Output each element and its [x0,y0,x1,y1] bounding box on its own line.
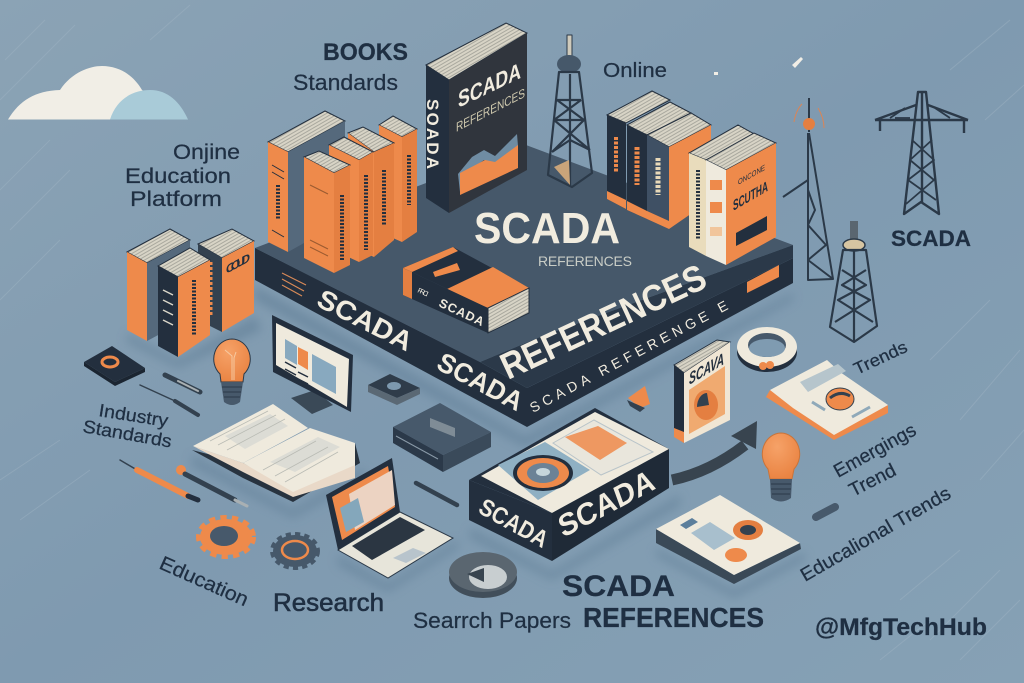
pylon [875,92,968,214]
label: scada references bottom: REFERENCES [583,602,764,633]
arrow [672,421,757,480]
small orange ribbon [627,386,650,412]
small open book [766,360,888,440]
label: research: Research [273,589,384,617]
platform text: scada referenge: SCADA REFERENGE E [527,297,730,416]
book 1 [607,91,670,209]
book b [304,151,350,273]
label: online education platform: Education [125,165,231,188]
ground shadows [127,285,805,598]
dark closed book [393,403,491,472]
book left 1 [127,229,190,341]
label: industry standards [81,400,173,452]
pen 2 [140,385,198,415]
label: scada right: SCADA [891,226,971,251]
white specks [714,57,803,75]
book d [348,127,394,257]
label: online education platform: Onjine [173,141,240,164]
label: industry standards: Standards [81,416,173,452]
platform [255,145,793,427]
label: handle: @MfgTechHub [815,614,987,641]
label: education: Education [156,552,252,611]
label: online: Online [603,60,667,82]
gear gray [273,535,317,567]
disc pie icon [449,552,517,598]
laptop [326,458,453,578]
main book: scada references [423,23,527,213]
box label right: SCADA [554,464,659,545]
bulb 1 [214,339,250,405]
cover title: SCADA [458,58,521,114]
cover text: SCUTHA [733,178,768,215]
title: SCAVA [689,348,724,389]
orange books group [268,111,417,273]
label: scada references bottom: SCADA [562,570,675,603]
label: trends: Trends [851,337,910,379]
orange pencil [120,460,198,500]
cover overline: ONCONE [738,162,765,187]
book spine text: SCADA [437,296,486,329]
box label left: SCADA [474,494,553,554]
book left 3: COUD [226,250,250,277]
small bar [816,507,835,517]
book: scada small [674,340,730,443]
platform subtitle: references: REFERENCES [538,253,632,269]
thin tower [783,98,833,280]
book 3 [647,113,711,229]
platform text: references: REFERENCES [494,256,713,387]
book 5 [706,133,776,265]
label: emerging trend: Emergings [830,420,920,482]
book front code: FRCI [416,287,429,298]
cloud [8,66,188,120]
book 4 [689,125,756,256]
cover subtitle: REFERENCES [456,85,525,135]
pen 3 [416,483,457,505]
label: emerging trend: Trend [846,460,900,501]
spine text: SOADA [423,99,442,169]
ring [737,327,797,372]
label: standards: Standards [293,70,398,95]
open book [192,404,360,502]
right books group [607,91,776,265]
label: industry standards: Industry [97,400,170,431]
gear orange [200,519,252,555]
label: scada references bottom [562,570,764,633]
monitor [272,315,353,414]
bulb 2 [762,433,800,502]
left books group [127,229,254,357]
platform title: scada: SCADA [474,204,620,253]
flat book on platform [403,247,529,333]
book 2 [627,102,691,219]
label: educational trends: Educalional Trends [797,483,955,586]
label: books: BOOKS [323,39,408,66]
pen with orange cap [176,465,247,506]
book c [329,137,373,262]
oil tower right [830,221,877,342]
tower center [548,35,592,187]
cover chart [458,134,518,195]
book e [379,116,417,242]
book a [268,111,345,252]
tablet icon [84,346,145,386]
pen 1 [165,375,200,392]
document stack [656,495,801,584]
label: search papers: Searrch Papers [413,608,571,633]
label: online education platform [125,141,240,211]
scada box [469,408,669,561]
small device [368,374,420,405]
label: online education platform: Platform [130,188,222,211]
platform text: left scada 1: SCADA [312,284,418,357]
platform text: left scada 2: SCADA [432,347,528,417]
book left 2 [158,248,210,357]
